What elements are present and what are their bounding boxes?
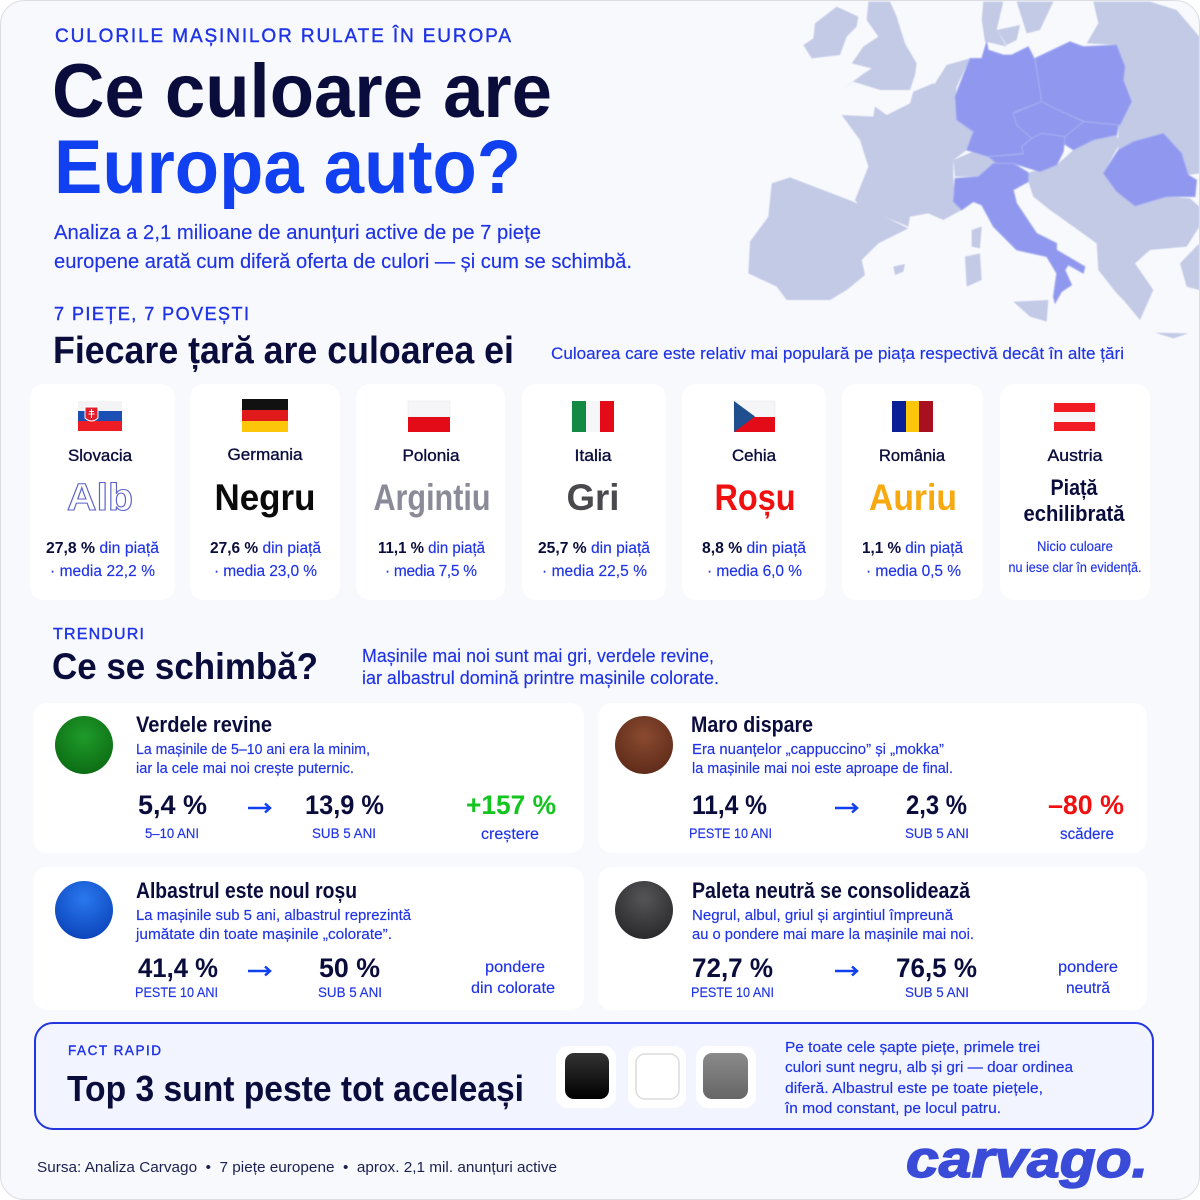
card: Italia: · media 22,5 % <box>542 563 647 580</box>
flag: Italy <box>572 401 614 432</box>
card: Germania: · media 23,0 % <box>214 563 317 580</box>
arrow <box>248 966 270 976</box>
source line: Sursa: Analiza Carvago • 7 piețe europene • aprox. 2,1 mil. anunțuri active <box>37 1159 557 1176</box>
card: Germania <box>190 384 340 600</box>
trend card: neutral: SUB 5 ANI <box>905 985 969 1000</box>
trend card: brown: scădere <box>1060 826 1114 843</box>
card: Polonia: 11,1 % din piață <box>378 540 485 557</box>
card: Romania: 1,1 % din piață <box>862 540 963 557</box>
flag: Slovakia <box>78 401 122 431</box>
trend card: neutral: PESTE 10 ANI <box>691 985 774 1000</box>
trend card: blue: Albastrul este noul roșu <box>136 878 357 903</box>
trend card: neutral: pondere <box>1058 959 1118 976</box>
section note: Culoarea care este relativ mai populară pe piața respectivă decât în alte țări <box>551 344 1124 363</box>
trend card: neutral: 72,7 % <box>692 953 773 983</box>
trend card: brown: –80 % <box>1048 790 1124 820</box>
intro text <box>54 222 632 273</box>
card: Slovacia: · media 22,2 % <box>50 563 155 580</box>
trend card: green: 13,9 % <box>305 790 384 820</box>
card: Polonia: · media 7,5 % <box>385 563 477 580</box>
section label: trenduri: TRENDURI <box>53 626 144 643</box>
trend card: neutral: au o pondere mai mare la mașinile mai noi. <box>692 926 974 943</box>
title <box>52 49 552 210</box>
arrow <box>835 804 857 812</box>
trend card: brown <box>598 703 1147 853</box>
callout: fact rapid: diferă. Albastrul este pe toate piețele, <box>785 1080 1043 1097</box>
card: Romania: Auriu <box>869 477 957 518</box>
flag: Poland <box>408 401 450 432</box>
card: Romania: România <box>879 446 946 465</box>
card: Germania: 27,6 % din piață <box>210 540 321 557</box>
trend card: neutral: 76,5 % <box>896 953 977 983</box>
flag: Germany <box>242 399 288 432</box>
trend card: neutral: neutră <box>1066 980 1110 997</box>
trend card: brown: SUB 5 ANI <box>905 826 969 841</box>
section note: trends <box>362 646 719 688</box>
trend card: blue <box>33 867 584 1010</box>
map of Europe <box>748 2 1199 338</box>
trend card: neutral: Paleta neutră se consolidează <box>692 878 971 903</box>
card: Slovacia: 27,8 % din piață <box>46 540 159 557</box>
trend card: green: Verdele revine <box>136 712 272 737</box>
card: Polonia: Polonia <box>402 446 460 465</box>
card: Austria: nu iese clar în evidență. <box>1008 559 1142 575</box>
card: Austria: echilibrată <box>1024 501 1125 526</box>
trend card: blue: pondere <box>485 959 545 976</box>
card: Polonia <box>356 384 505 600</box>
trend card: green <box>33 703 584 853</box>
title: Ce culoare are <box>52 49 552 134</box>
callout: fact rapid: în mod constant, pe locul patru. <box>784 1100 1001 1117</box>
trend card: blue: din colorate <box>471 980 555 997</box>
trend card: green: creștere <box>481 826 539 843</box>
trend card: brown: 2,3 % <box>906 790 967 820</box>
trend card: brown: PESTE 10 ANI <box>689 826 772 841</box>
card: Germania: Germania <box>228 445 303 464</box>
flag: Czechia <box>734 401 775 432</box>
trend card: brown: la mașinile mai noi este aproape de final. <box>692 760 953 777</box>
card: Slovacia: Alb <box>67 477 133 519</box>
icon: blue swatch <box>55 881 113 939</box>
section label: 7 piete: 7 PIEȚE, 7 POVEȘTI <box>54 304 249 324</box>
intro text: europene arată cum diferă oferta de culori — și cum se schimbă. <box>54 251 632 273</box>
card: Cehia <box>682 384 826 600</box>
trend card: blue: La mașinile sub 5 ani, albastrul reprezintă <box>136 907 412 924</box>
flag: Romania <box>892 401 933 432</box>
trend card: neutral <box>598 867 1147 1010</box>
section note: trends: iar albastrul domină printre mașinile colorate. <box>362 668 719 688</box>
callout: fact rapid: Top 3 sunt peste tot aceleași <box>67 1068 524 1109</box>
callout: fact rapid: culori sunt negru, alb și gri — doar ordinea <box>785 1059 1074 1076</box>
icon: brown swatch <box>615 716 673 774</box>
card: Cehia: · media 6,0 % <box>707 563 802 580</box>
trend card: brown: Maro dispare <box>691 712 813 737</box>
trend card: green: 5–10 ANI <box>145 826 199 841</box>
section note: trends: Mașinile mai noi sunt mai gri, verdele revine, <box>362 646 714 666</box>
trend card: blue: jumătate din toate mașinile „colorate”. <box>135 926 392 943</box>
intro text: Analiza a 2,1 milioane de anunțuri active de pe 7 piețe <box>54 222 541 244</box>
trend card: blue: 41,4 % <box>138 953 218 983</box>
trend card: brown: Era nuanțelor „cappuccino” și „mokka” <box>692 741 944 758</box>
trend card: green: La mașinile de 5–10 ani era la minim, <box>136 741 370 758</box>
card: Cehia: Roșu <box>714 477 796 518</box>
swatches: black white gray <box>556 1046 756 1108</box>
card: Austria: Austria <box>1048 446 1103 465</box>
flag: Austria <box>1054 403 1095 431</box>
icon: green swatch <box>55 716 113 774</box>
card: Germania: Negru <box>214 477 316 518</box>
icon: dark swatch <box>615 881 673 939</box>
callout: fact rapid <box>35 1023 1153 1129</box>
card: Austria <box>1000 384 1150 600</box>
trend card: blue: 50 % <box>319 953 380 983</box>
card: Italia <box>522 384 666 600</box>
callout: fact rapid: Pe toate cele șapte piețe, primele trei <box>785 1039 1040 1056</box>
card: Polonia: Argintiu <box>374 477 490 518</box>
arrow <box>248 804 270 812</box>
card: Romania: · media 0,5 % <box>866 563 961 580</box>
card: Austria: Piață <box>1050 475 1098 500</box>
card: Austria: Nicio culoare <box>1037 538 1113 554</box>
callout: fact rapid: FACT RAPID <box>68 1043 161 1058</box>
eyebrow: CULORILE MAȘINILOR RULATE ÎN EUROPA <box>55 25 511 47</box>
trend card: green: 5,4 % <box>138 790 207 820</box>
card: Slovacia: Slovacia <box>68 446 133 465</box>
card: Cehia: 8,8 % din piață <box>702 540 806 557</box>
section heading: trends: Ce se schimbă? <box>52 646 318 687</box>
trend card: neutral: Negrul, albul, griul și argintiul împreună <box>692 907 954 924</box>
trend card: blue: PESTE 10 ANI <box>135 985 218 1000</box>
card: Italia: 25,7 % din piață <box>538 540 650 557</box>
trend card: green: iar la cele mai noi crește puternic. <box>136 760 354 777</box>
card: Slovacia <box>30 384 175 600</box>
card: Italia: Gri <box>566 477 620 518</box>
card: Cehia: Cehia <box>732 446 777 465</box>
arrow <box>835 966 857 976</box>
section heading: countries: Fiecare țară are culoarea ei <box>53 330 514 372</box>
card: Italia: Italia <box>574 446 612 465</box>
trend card: brown: 11,4 % <box>692 790 767 820</box>
title: Europa auto? <box>54 125 521 210</box>
card: Romania <box>842 384 983 600</box>
trend card: green: +157 % <box>466 790 556 820</box>
logo: carvago: carvago. <box>906 1131 1148 1189</box>
trend card: blue: SUB 5 ANI <box>318 985 382 1000</box>
trend card: green: SUB 5 ANI <box>312 826 376 841</box>
